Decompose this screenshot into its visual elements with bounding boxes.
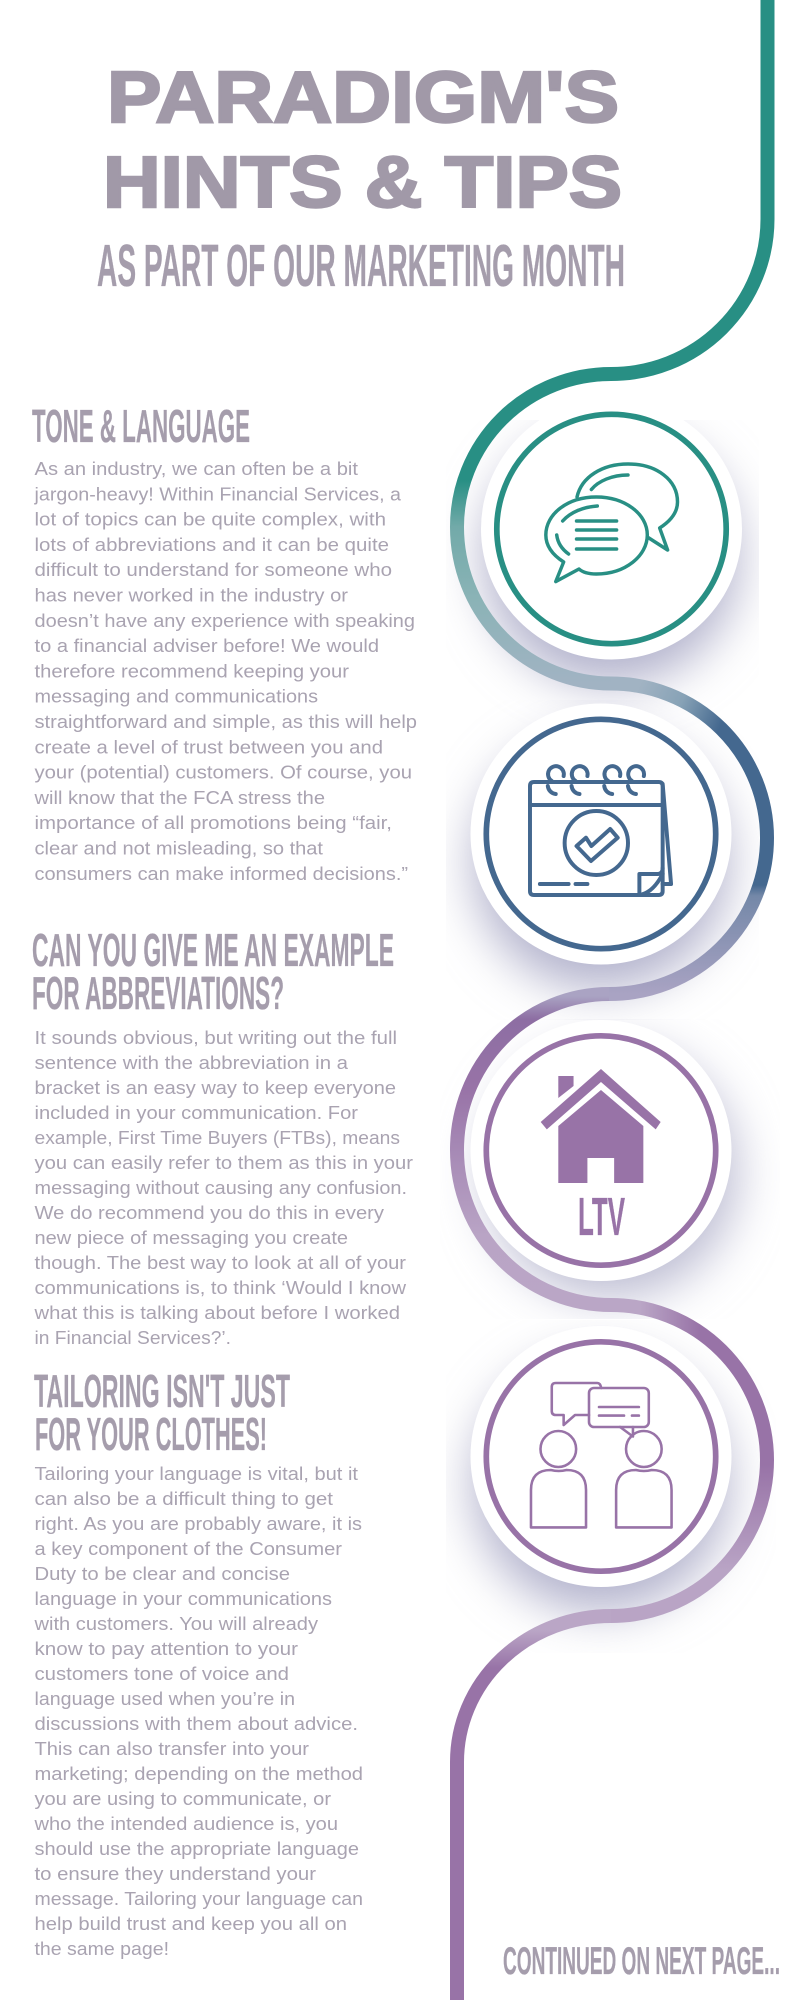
text block: tailoring: This can also transfer into your [34,1739,309,1759]
text block: abbreviations example: example, First Time Buyers (FTBs), means [34,1128,400,1148]
title: PARADIGM'S [107,58,619,138]
text block: tone and language: has never worked in the industry or [34,586,348,606]
text block: tone and language [33,459,417,884]
text block: abbreviations example: though. The best way to look at all of your [34,1253,406,1273]
text block: tone and language: lot of topics can be quite complex, with [34,510,386,530]
text block: tone and language: your (potential) customers. Of course, you [34,763,412,783]
text block: tailoring [33,1464,363,1959]
text block: tailoring: you are using to communicate, or [34,1789,331,1809]
text block: tailoring: the same page! [34,1939,169,1959]
text block: tailoring: can also be a difficult thing to get [34,1489,333,1509]
circle badge: conversation [481,398,742,660]
text: CAN YOU GIVE ME AN EXAMPLE [32,924,394,976]
text block: abbreviations example: included in your communication. For [34,1103,358,1123]
text: TONE & LANGUAGE [32,400,250,452]
heading: tailoring [34,1365,290,1460]
circle badge: LTV house: LTV [578,1187,625,1247]
icon: people with speech bubbles [531,1383,672,1527]
circle badge: LTV house [470,1020,732,1281]
text block: tailoring: with customers. You will already [33,1614,318,1634]
heading: abbreviations example: FOR ABBREVIATIONS? [32,967,284,1019]
circle shadows [473,429,739,1612]
text block: tailoring: customers tone of voice and [34,1664,289,1684]
circle badge: two people talking [470,1326,732,1587]
text block: tone and language: clear and not misleading, so that [34,838,323,858]
text block: tone and language: to a financial adviser before! We would [34,636,379,656]
text block: tone and language: lots of abbreviations and it can be quite [34,535,389,555]
text block: tone and language: doesn’t have any experience with speaking [34,611,415,631]
text block: abbreviations example [33,1028,413,1348]
icon: calendar with check [530,766,671,895]
text block: abbreviations example: new piece of messaging you create [34,1228,348,1248]
text block: abbreviations example: you can easily refer to them as this in your [34,1153,413,1173]
text block: tone and language: consumers can make informed decisions.” [34,864,408,884]
heading: tailoring: FOR YOUR CLOTHES! [35,1408,267,1460]
text block: tone and language: difficult to understand for someone who [34,560,392,580]
text block: tailoring: Tailoring your language is vital, but it [34,1464,358,1484]
text: TAILORING ISN'T JUST [34,1365,290,1417]
text block: tone and language: will know that the FCA stress the [33,788,325,808]
text block: abbreviations example: It sounds obvious, but writing out the full [34,1028,397,1048]
title: HINTS & TIPS [103,143,622,223]
text block: tailoring: message. Tailoring your language can [34,1889,363,1909]
heading: abbreviations example [32,924,394,1019]
text block: tone and language: straightforward and simple, as this will help [34,712,417,732]
text block: tailoring: a key component of the Consumer [34,1539,342,1559]
text block: abbreviations example: in Financial Services?’. [34,1328,231,1348]
text block: tailoring: know to pay attention to your [34,1639,298,1659]
text block: abbreviations example: sentence with the abbreviation in a [34,1053,349,1073]
text block: tailoring: to ensure they understand your [34,1864,316,1884]
title [103,58,622,223]
text block: tone and language: jargon-heavy! Within Financial Services, a [33,484,402,504]
text block: tailoring: right. As you are probably aware, it is [34,1514,362,1534]
text block: tailoring: who the intended audience is, you [33,1814,338,1834]
text block: tailoring: help build trust and keep you all on [34,1914,347,1934]
text block: abbreviations example: communications is, to think ‘Would I know [34,1278,407,1298]
winding path line [457,0,768,2000]
text block: abbreviations example: bracket is an easy way to keep everyone [34,1078,396,1098]
text block: tailoring: language used when you’re in [34,1689,295,1709]
text block: tailoring: marketing; depending on the method [34,1764,363,1784]
text block: abbreviations example: messaging without causing any confusion. [34,1178,407,1198]
text block: tailoring: should use the appropriate language [34,1839,359,1859]
text block: tone and language: As an industry, we can often be a bit [34,459,358,479]
text block: tone and language: messaging and communications [34,687,318,707]
text block: tone and language: importance of all promotions being “fair, [34,813,392,833]
text block: tone and language: therefore recommend keeping your [34,661,349,681]
text block: tailoring: Duty to be clear and concise [34,1564,290,1584]
icon: house [541,1069,661,1183]
text block: abbreviations example: what this is talking about before I worked [33,1303,400,1323]
circle badge: calendar [470,704,732,964]
text block: abbreviations example: We do recommend you do this in every [34,1203,384,1223]
icon: speech bubbles [546,464,678,582]
text block: tailoring: discussions with them about advice. [34,1714,358,1734]
text block: tailoring: language in your communications [34,1589,332,1609]
text block: tone and language: create a level of trust between you and [34,737,383,757]
